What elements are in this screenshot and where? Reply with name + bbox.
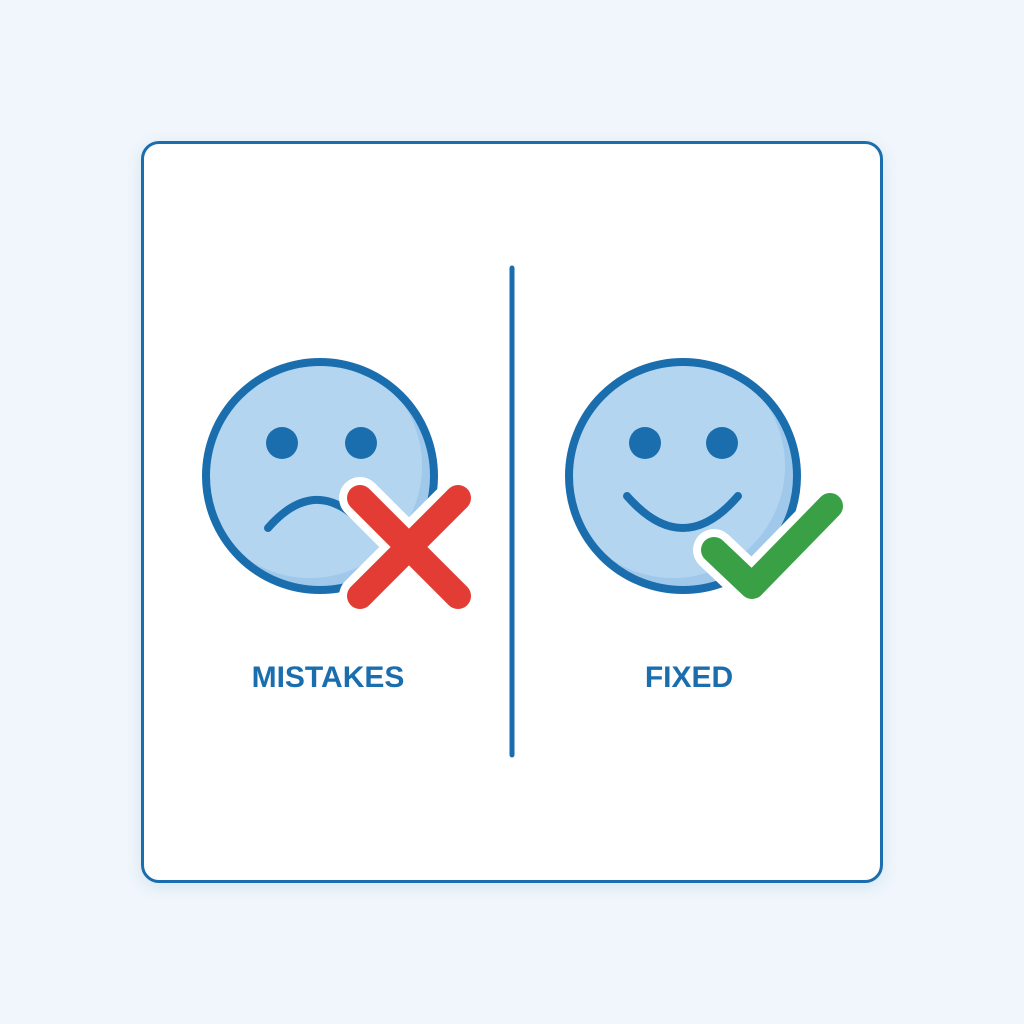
icon: sad face [198,354,434,590]
icon: red cross [360,498,458,596]
illustration [202,266,843,758]
label: mistakes: MISTAKES [252,661,404,694]
card panel [141,141,883,883]
divider [510,268,514,755]
label: fixed: FIXED [645,661,733,694]
icon: happy face [561,354,797,590]
icon: green check [714,506,830,586]
